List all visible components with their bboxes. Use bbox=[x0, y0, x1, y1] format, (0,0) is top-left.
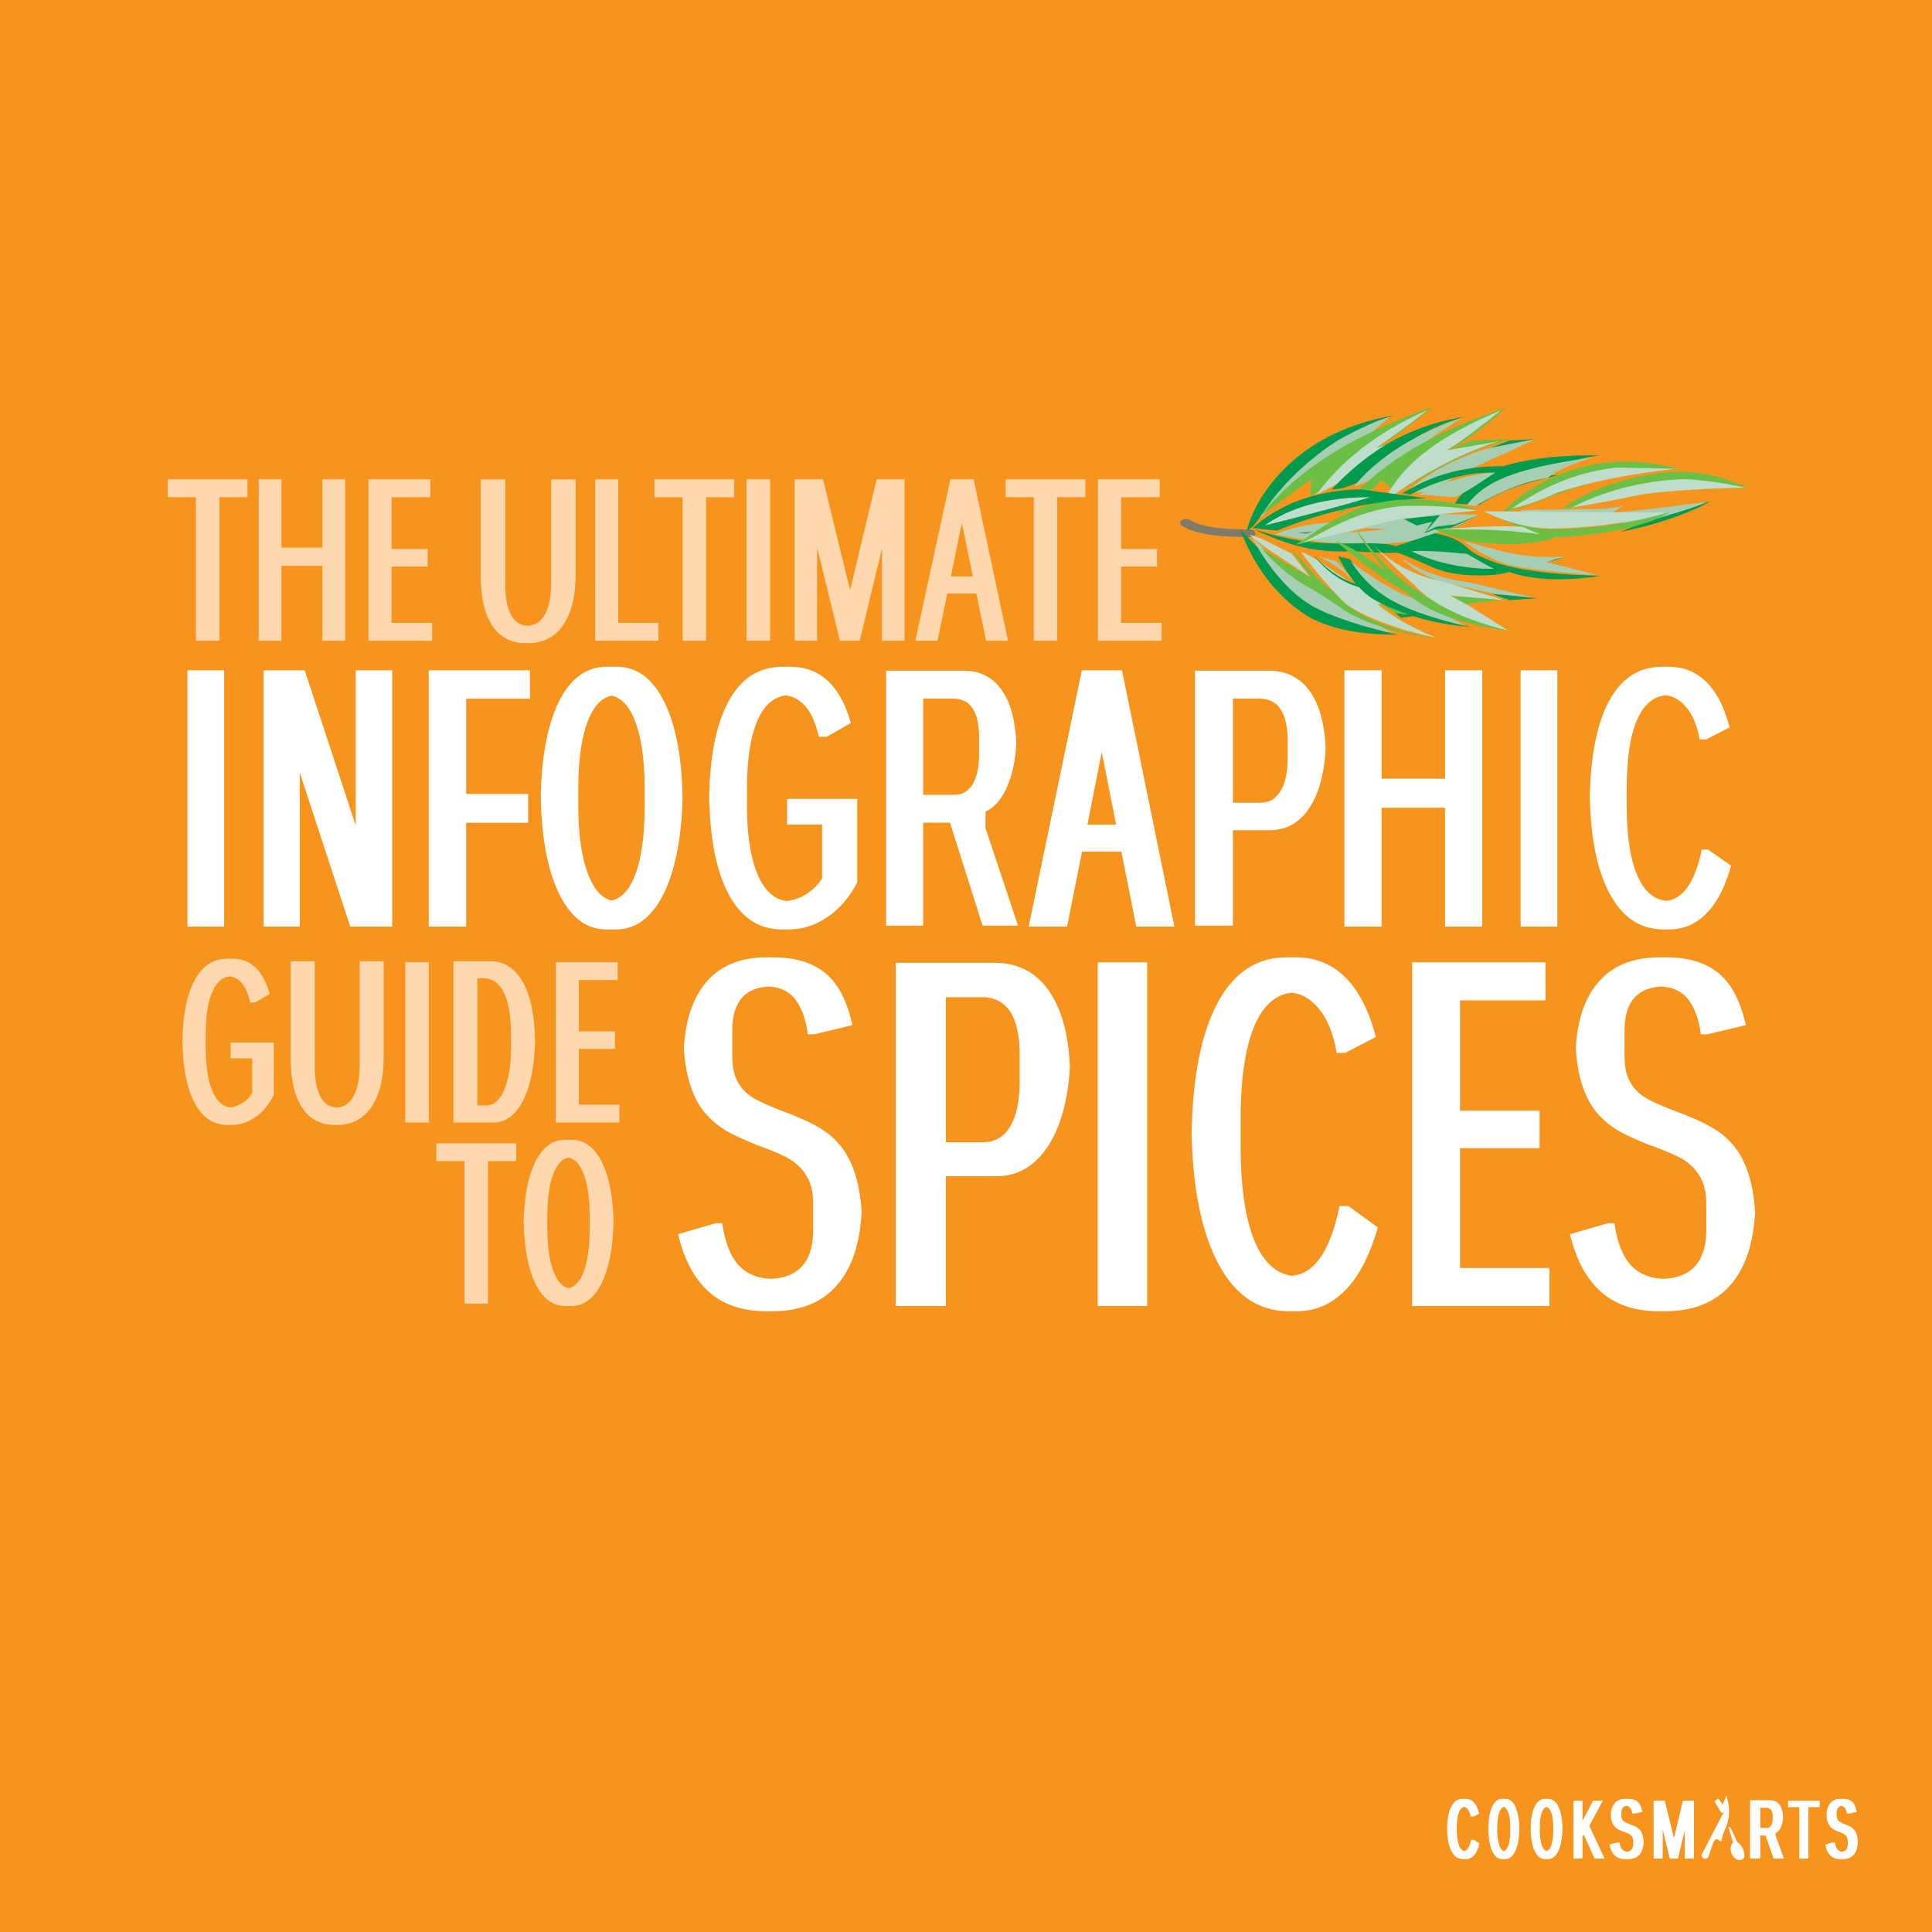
heading line: THE ULTIMATE: U bbox=[473, 421, 584, 701]
heading line: INFOGRAPHIC: G bbox=[705, 579, 866, 1020]
heading line: SPICES bbox=[668, 836, 1764, 1437]
heading line: THE ULTIMATE: M bbox=[787, 430, 912, 692]
logo: Cook Smarts: O bbox=[1531, 1780, 1563, 1879]
heading line: GUIDE: E bbox=[556, 913, 616, 1174]
heading line: INFOGRAPHIC: A bbox=[1039, 591, 1165, 1009]
upper leaves bbox=[1247, 407, 1535, 531]
central back leaf bbox=[1275, 514, 1478, 544]
heading line: TO: O bbox=[522, 1084, 616, 1364]
heading line: INFOGRAPHIC: I bbox=[1509, 591, 1568, 1009]
lower outer leaf bbox=[1240, 529, 1437, 638]
logo: Cook Smarts: T bbox=[1789, 1783, 1818, 1877]
logo: Cook Smarts: K bbox=[1572, 1783, 1603, 1877]
heading line: THE ULTIMATE: A bbox=[920, 430, 1004, 692]
heading line: THE ULTIMATE: T bbox=[1009, 430, 1082, 692]
sprig stem bbox=[1186, 523, 1250, 533]
heading line: INFOGRAPHIC bbox=[176, 579, 1737, 1020]
heading line: INFOGRAPHIC: I bbox=[176, 591, 235, 1009]
heading line: SPICES: E bbox=[1410, 856, 1543, 1416]
heading line: GUIDE: D bbox=[448, 903, 537, 1183]
heading line: THE ULTIMATE: T bbox=[658, 430, 731, 692]
heading line: SPICES: S bbox=[1560, 836, 1764, 1437]
heading line: SPICES: C bbox=[1184, 836, 1386, 1437]
heading line: TO: T bbox=[440, 1094, 512, 1355]
heading line: THE ULTIMATE: H bbox=[253, 430, 352, 692]
logo: Cook Smarts: M bbox=[1651, 1783, 1696, 1877]
heading line: GUIDE: G bbox=[179, 903, 280, 1183]
heading line: THE ULTIMATE: E bbox=[1098, 430, 1158, 692]
heading line: INFOGRAPHIC: C bbox=[1584, 579, 1737, 1020]
heading line: INFOGRAPHIC: F bbox=[427, 591, 526, 1009]
icon: herb sprig bbox=[1186, 407, 1748, 638]
logo: Cook Smarts: R bbox=[1748, 1781, 1784, 1879]
logo: Cook Smarts: S bbox=[1825, 1780, 1859, 1879]
logo: Cook Smarts: O bbox=[1488, 1780, 1519, 1879]
heading line: THE ULTIMATE: I bbox=[738, 430, 778, 692]
right leaves bbox=[1503, 461, 1748, 532]
middle dark leaves bbox=[1253, 455, 1600, 531]
icon: knife and spoon letter A bbox=[1702, 1795, 1744, 1860]
lower front leaf bbox=[1335, 529, 1511, 631]
logo: Cook Smarts: S bbox=[1609, 1780, 1645, 1879]
logo: Cook Smarts bbox=[1447, 1780, 1859, 1879]
heading line: SPICES: P bbox=[880, 836, 1077, 1437]
heading line: GUIDE bbox=[179, 903, 616, 1183]
heading line: INFOGRAPHIC: P bbox=[1183, 579, 1330, 1020]
heading line: INFOGRAPHIC: N bbox=[257, 591, 398, 1009]
heading line: SPICES: I bbox=[1086, 856, 1159, 1416]
heading line: INFOGRAPHIC: R bbox=[876, 579, 1024, 1020]
heading line: THE ULTIMATE: T bbox=[172, 430, 244, 692]
heading line: INFOGRAPHIC: O bbox=[538, 579, 685, 1020]
logo: Cook Smarts: C bbox=[1447, 1780, 1480, 1879]
heading line: SPICES: S bbox=[668, 836, 871, 1437]
heading line: THE ULTIMATE: L bbox=[592, 430, 656, 692]
heading line: GUIDE: I bbox=[397, 913, 437, 1174]
heading line: GUIDE: U bbox=[283, 903, 392, 1183]
heading line: INFOGRAPHIC: H bbox=[1335, 591, 1492, 1009]
heading line: THE ULTIMATE bbox=[172, 421, 1158, 701]
heading line: TO bbox=[440, 1084, 616, 1364]
central wavy leaves bbox=[1296, 499, 1669, 545]
lower middle leaf bbox=[1314, 555, 1470, 627]
heading line: THE ULTIMATE: E bbox=[369, 430, 429, 692]
lower right leaves bbox=[1254, 529, 1601, 604]
